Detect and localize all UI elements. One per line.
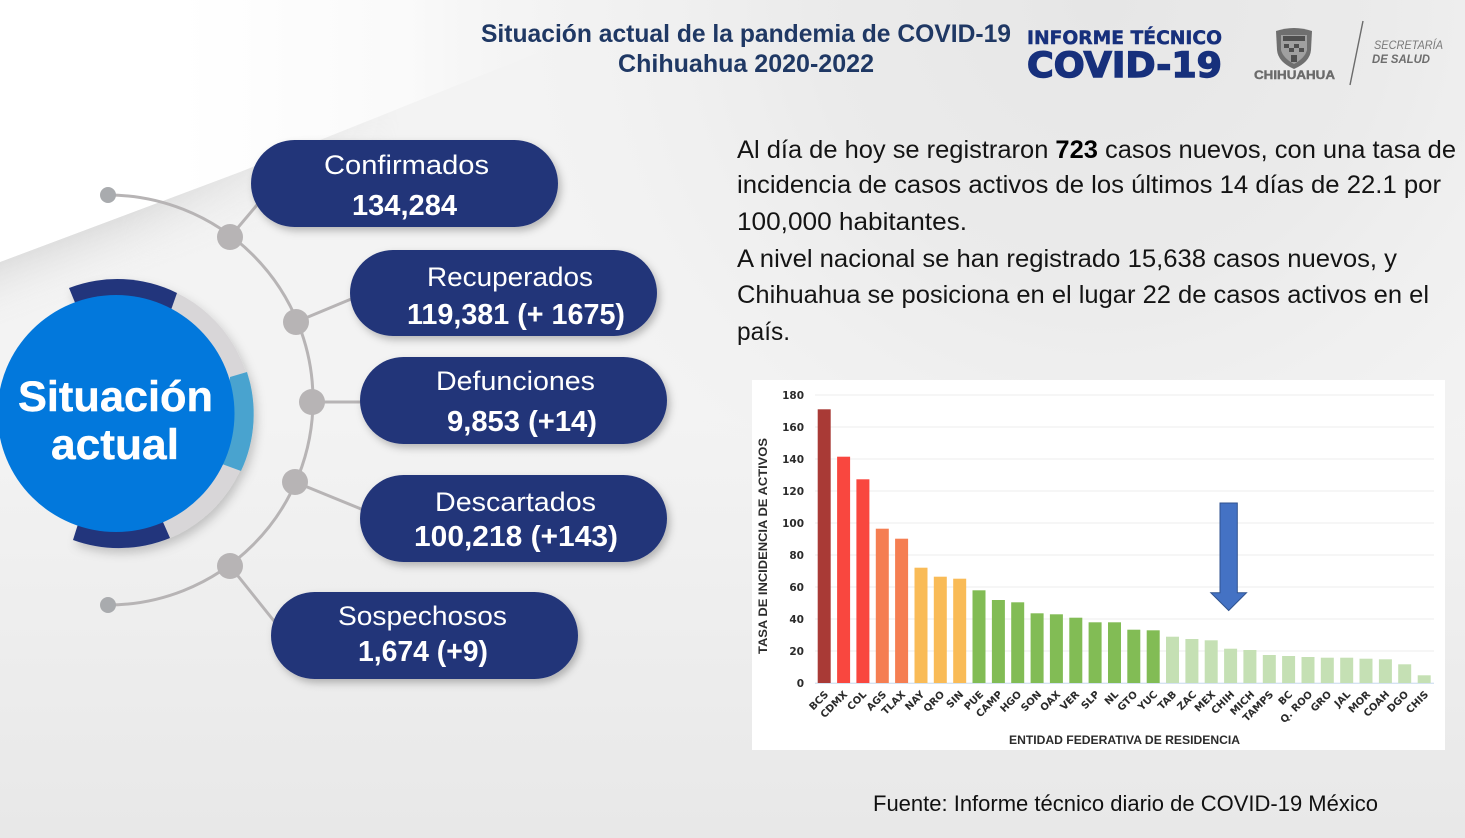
badge title: Situación — [18, 373, 213, 421]
logo: Secretaría de Salud: DE SALUD — [1372, 54, 1430, 66]
x axis state labels: GTO — [1116, 689, 1140, 714]
pill: Descartados: Descartados — [435, 487, 596, 517]
x axis state labels: MICH — [1229, 689, 1257, 718]
x axis state labels — [808, 689, 1431, 726]
pill: Defunciones: 9,853 (+14) — [447, 406, 597, 438]
pill: Confirmados — [251, 140, 558, 227]
x axis state labels: COL — [846, 689, 870, 713]
text block: daily summary: país. — [737, 318, 790, 346]
gridlines and y axis ticks: 0 — [797, 678, 804, 690]
gridlines and y axis ticks: 20 — [789, 646, 804, 658]
y axis title: TASA DE INCIDENCIA DE ACTIVOS — [758, 438, 770, 654]
pill: Defunciones — [360, 357, 667, 444]
title: Chihuahua 2020-2022 — [618, 50, 874, 78]
badge title — [18, 373, 213, 469]
x axis state labels: MOR — [1347, 689, 1373, 716]
logo: Chihuahua shield — [1254, 28, 1335, 82]
central badge: Situación actual — [0, 279, 254, 548]
x axis state labels: TAB — [1156, 689, 1179, 712]
x axis state labels: VER — [1059, 689, 1082, 713]
badge title: actual — [51, 421, 179, 469]
logo: Informe técnico COVID-19 — [1027, 26, 1222, 86]
x axis state labels: AGS — [865, 689, 889, 713]
x axis state labels: GRO — [1309, 689, 1334, 714]
x axis state labels: OAX — [1039, 689, 1063, 714]
logo: Informe técnico COVID-19: COVID-19 — [1027, 46, 1222, 86]
x axis state labels: NAY — [903, 689, 928, 713]
title — [481, 20, 1011, 78]
x axis title: ENTIDAD FEDERATIVA DE RESIDENCIA — [1009, 733, 1240, 747]
pill: Sospechosos: Sospechosos — [338, 601, 507, 631]
bars — [818, 409, 1431, 683]
gridlines and y axis ticks: 160 — [782, 422, 804, 434]
pill: Recuperados — [350, 250, 657, 336]
gridlines and y axis ticks: 140 — [782, 454, 804, 466]
gridlines and y axis ticks: 100 — [782, 518, 804, 530]
pill: Defunciones: Defunciones — [436, 366, 595, 396]
title: Situación actual de la pandemia de COVID-19 — [481, 20, 1011, 48]
text block: daily summary: Chihuahua se posiciona en el lugar 22 de casos activos en el — [737, 281, 1429, 309]
logo divider — [1350, 21, 1363, 85]
logo: Chihuahua shield: CHIHUAHUA — [1254, 68, 1335, 82]
x axis state labels: SIN — [945, 689, 966, 711]
text block: daily summary — [737, 136, 1456, 346]
gridlines and y axis ticks: 180 — [782, 390, 804, 402]
pill: Sospechosos: 1,674 (+9) — [358, 636, 488, 668]
source note: Fuente: Informe técnico diario de COVID-19 México — [873, 791, 1378, 816]
logo: Informe técnico COVID-19: INFORME TÉCNICO — [1027, 26, 1222, 49]
text block: daily summary: Al día de hoy se registraron 723 casos nuevos, con una tasa de — [737, 136, 1456, 164]
x axis state labels: ZAC — [1176, 689, 1199, 713]
logo: Secretaría de Salud: SECRETARÍA — [1374, 39, 1443, 52]
pill: Recuperados: 119,381 (+ 1675) — [407, 299, 625, 331]
x axis state labels: Q. ROO — [1279, 689, 1315, 726]
x axis state labels: NL — [1103, 689, 1122, 708]
x axis state labels: DGO — [1386, 689, 1411, 715]
x axis state labels: CDMX — [819, 689, 850, 721]
network nodes — [100, 187, 325, 613]
x axis state labels: QRO — [922, 689, 947, 715]
pill: Sospechosos — [271, 592, 578, 679]
gridlines and y axis ticks — [782, 390, 1434, 690]
text block: daily summary: A nivel nacional se han registrado 15,638 casos nuevos, y — [737, 245, 1397, 273]
logo: Secretaría de Salud — [1372, 39, 1443, 66]
gridlines and y axis ticks: 80 — [789, 550, 804, 562]
pill: Descartados — [360, 475, 667, 562]
connector arc network — [108, 195, 366, 626]
x axis state labels: TAMPS — [1241, 689, 1276, 724]
x axis state labels: TLAX — [880, 689, 908, 717]
x axis state labels: CHIH — [1210, 689, 1237, 717]
x axis state labels: SLP — [1080, 689, 1102, 712]
background — [0, 0, 467, 274]
bar chart panel — [752, 380, 1445, 750]
x axis state labels: SON — [1019, 689, 1044, 714]
x axis state labels: BCS — [808, 689, 831, 713]
pill: Recuperados: Recuperados — [427, 262, 593, 292]
x axis state labels: BC — [1277, 689, 1295, 708]
gridlines and y axis ticks: 40 — [789, 614, 804, 626]
x axis state labels: CAMP — [974, 689, 1005, 720]
pill: Confirmados: Confirmados — [324, 150, 489, 180]
x axis state labels: YUC — [1136, 689, 1160, 714]
pill: Descartados: 100,218 (+143) — [414, 521, 618, 553]
x axis state labels: HGO — [999, 689, 1024, 715]
x axis state labels: JAL — [1332, 689, 1354, 710]
badge outer ring — [69, 279, 254, 548]
text block: daily summary: 100,000 habitantes. — [737, 208, 967, 236]
x axis state labels: PUE — [963, 689, 986, 713]
x axis state labels: COAH — [1362, 689, 1392, 720]
x axis state labels: MEX — [1193, 689, 1218, 714]
x axis state labels: CHIS — [1405, 689, 1431, 716]
gridlines and y axis ticks: 60 — [789, 582, 804, 594]
gridlines and y axis ticks: 120 — [782, 486, 804, 498]
arrow pointing to Chihuahua — [1211, 503, 1246, 610]
pill: Confirmados: 134,284 — [352, 190, 457, 222]
badge disc — [0, 295, 234, 532]
text block: daily summary: incidencia de casos activos de los últimos 14 días de 22.1 por — [737, 171, 1441, 199]
